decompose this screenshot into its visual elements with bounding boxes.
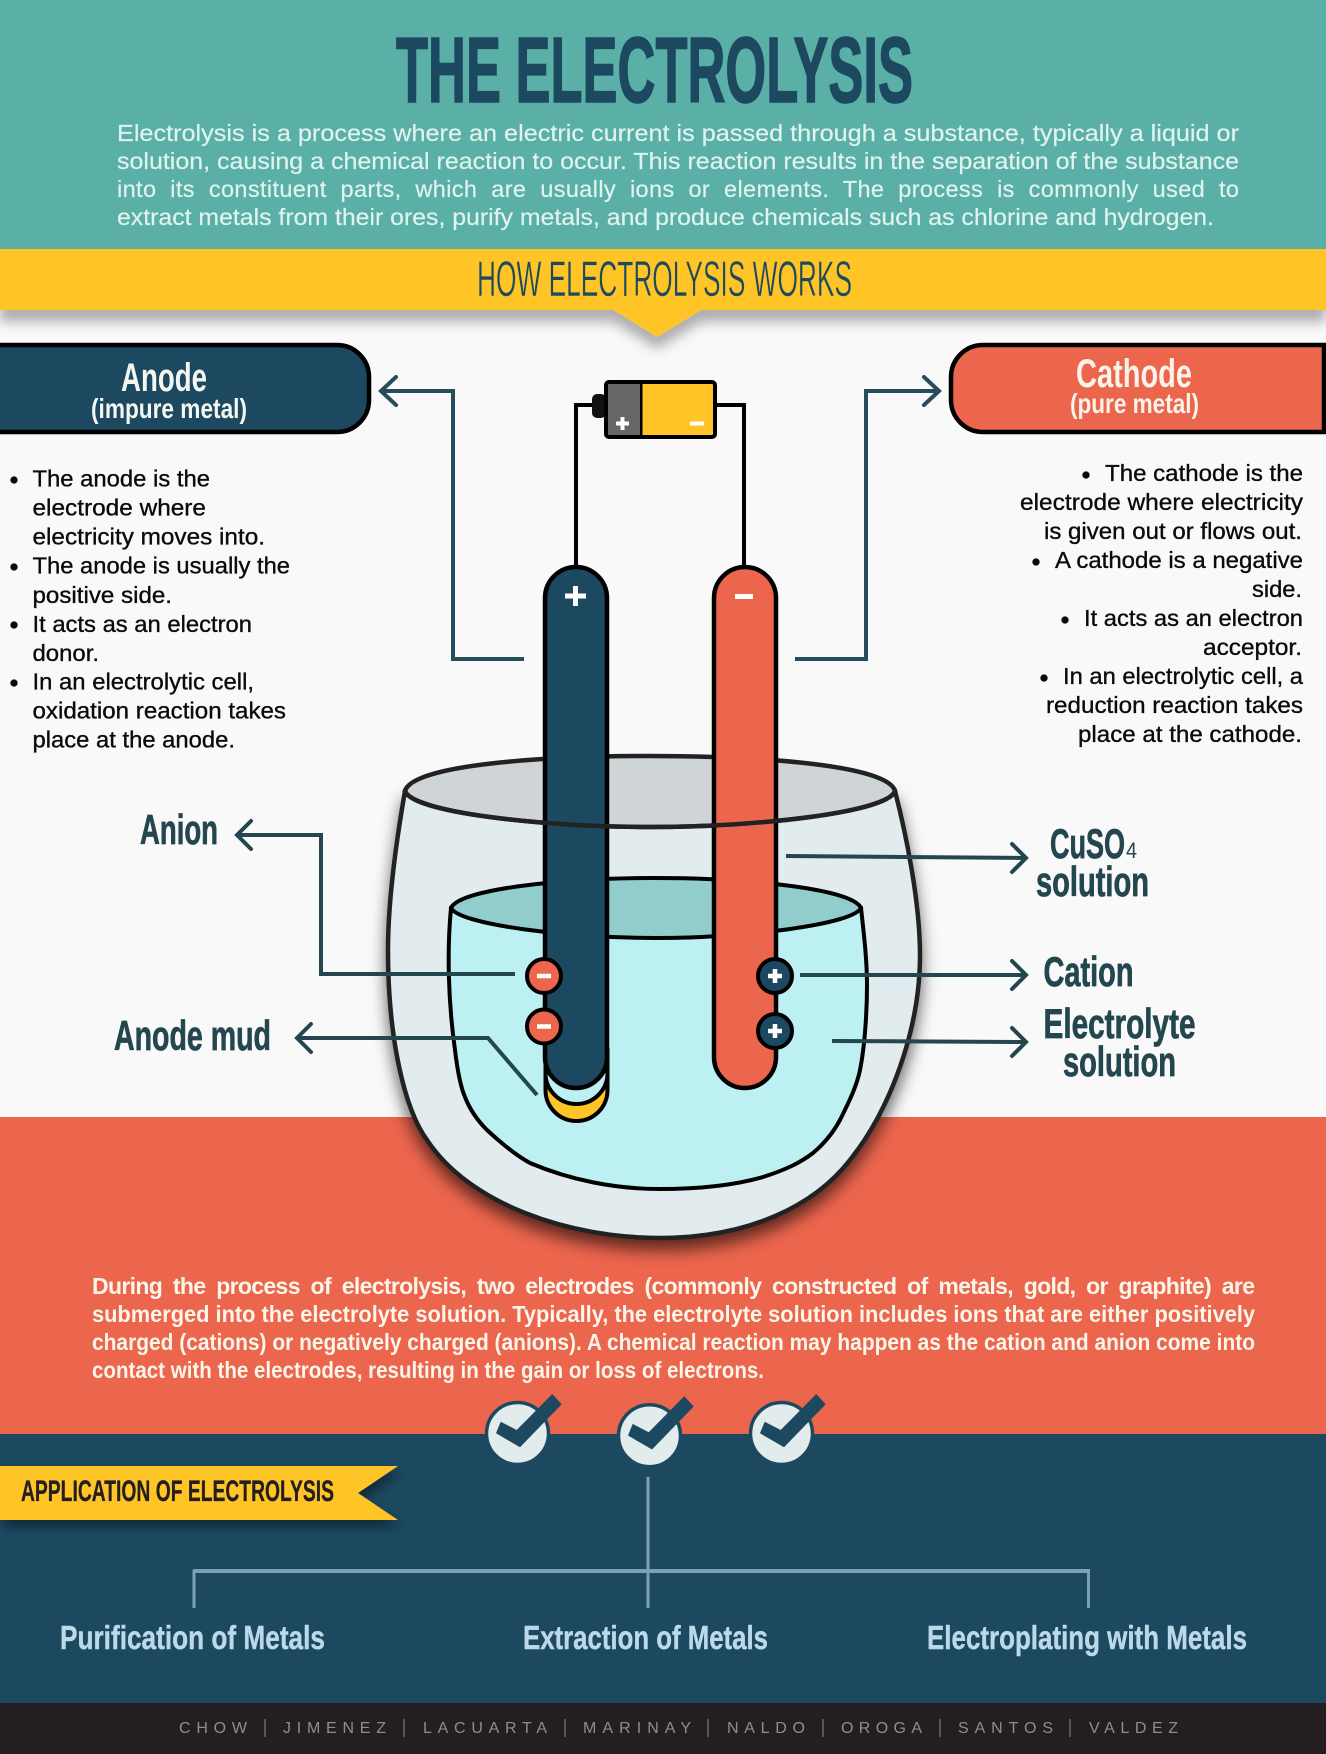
label: CuSO4 solution: 4	[1126, 838, 1137, 863]
label: CuSO4 solution	[1036, 820, 1149, 905]
panel: coral process section	[0, 1117, 1326, 1434]
panel: footer: LACUARTA	[423, 1720, 547, 1737]
panel: anode bullet list: positive side.	[32, 582, 172, 608]
section heading: HOW ELECTROLYSIS WORKS	[477, 251, 852, 307]
arrow: anion	[237, 821, 515, 974]
intro paragraph: solution, causing a chemical reaction to occur. This reaction results in the separation of the substance	[117, 148, 1239, 174]
panel: footer: NALDO	[727, 1720, 805, 1737]
process paragraph: submerged into the electrolyte solution. Typically, the electrolyte solution includes ions that are either positively	[92, 1301, 1255, 1327]
arrow: anode	[381, 377, 524, 659]
panel: cathode label	[951, 345, 1324, 432]
title: THE ELECTROLYSIS	[396, 18, 913, 122]
label: electroplating with metals: Electroplating with Metals	[927, 1619, 1247, 1656]
panel: cathode label: Cathode	[1076, 352, 1192, 396]
wires	[576, 405, 744, 567]
panel: footer	[0, 1703, 1326, 1754]
panel: footer: JIMENEZ	[283, 1720, 386, 1737]
cation ions	[758, 959, 792, 1048]
panel: anode bullet list: In an electrolytic cell,	[32, 668, 254, 694]
panel: cathode bullet list: It acts as an electron	[1084, 605, 1303, 631]
application banner: APPLICATION OF ELECTROLYSIS	[21, 1475, 334, 1508]
label: CuSO4 solution: CuSO	[1050, 820, 1125, 867]
panel: cathode bullet list: reduction reaction takes	[1046, 692, 1303, 718]
panel: anode bullet list: donor.	[32, 640, 99, 666]
panel: applications section	[0, 1434, 1326, 1703]
panel: cathode bullet list: is given out or flows out.	[1044, 518, 1302, 544]
panel: header	[0, 0, 1326, 249]
arrow: anode mud	[297, 1024, 537, 1095]
cathode electrode	[714, 567, 776, 1088]
electrolyte liquid	[449, 878, 867, 1189]
anion ions	[527, 959, 561, 1044]
panel: cathode bullet list: acceptor.	[1203, 634, 1302, 660]
icon: checkmark 2	[618, 1396, 694, 1467]
panel: anode bullet list: oxidation reaction takes	[32, 698, 286, 724]
label: extraction of metals: Extraction of Metals	[523, 1619, 768, 1656]
panel: cathode bullet list: The cathode is the	[1105, 460, 1303, 486]
anode mud deposit	[546, 1050, 608, 1121]
label: anode mud: Anode mud	[114, 1012, 271, 1059]
panel: cathode label: (pure metal)	[1070, 388, 1199, 419]
application banner	[0, 1466, 398, 1520]
intro paragraph	[117, 120, 1239, 230]
panel: anode bullet list: electrode where	[32, 494, 206, 520]
intro paragraph: into its constituent parts, which are usually ions or elements. The process is commonly used to	[117, 176, 1239, 202]
label: purification of metals: Purification of Metals	[60, 1619, 325, 1656]
label: electrolyte solution: Electrolyte	[1044, 1000, 1196, 1047]
panel: cathode bullet list: In an electrolytic cell, a	[1063, 663, 1304, 689]
panel: anode label	[0, 345, 369, 432]
panel: cathode bullet list	[1020, 460, 1304, 747]
label: CuSO4 solution: solution	[1036, 858, 1149, 905]
label: electrolyte solution	[1044, 1000, 1196, 1085]
intro paragraph: Electrolysis is a process where an electric current is passed through a substance, typically a liquid or	[117, 120, 1239, 146]
panel: cathode bullet list: place at the cathode.	[1078, 721, 1302, 747]
panel: footer: OROGA	[841, 1720, 922, 1737]
plus sign	[565, 586, 586, 606]
icon: checkmark 3	[750, 1394, 826, 1464]
label: cation: Cation	[1044, 948, 1134, 995]
intro paragraph: extract metals from their ores, purify metals, and produce chemicals such as chlorine and hydrogen.	[117, 204, 1214, 230]
arrow: cathode	[795, 377, 939, 659]
minus sign	[735, 594, 753, 599]
anode electrode	[545, 567, 607, 1088]
panel: anode bullet list: place at the anode.	[32, 726, 235, 752]
panel: anode label: (impure metal)	[91, 393, 247, 424]
panel: anode bullet list: It acts as an electron	[32, 611, 252, 637]
panel: footer: SANTOS	[958, 1720, 1053, 1737]
arrow: CuSO4 solution	[786, 844, 1026, 872]
arrow: cation	[800, 961, 1026, 989]
panel: anode bullet list: electricity moves into.	[32, 524, 265, 550]
label: electrolyte solution: solution	[1063, 1038, 1176, 1085]
process paragraph: contact with the electrodes, resulting in the gain or loss of electrons.	[92, 1357, 764, 1383]
panel: cathode bullet list: side.	[1252, 576, 1302, 602]
panel: anode bullet list	[10, 466, 290, 752]
panel: section banner	[0, 249, 1326, 337]
panel: footer: VALDEZ	[1089, 1720, 1178, 1737]
beaker body	[388, 791, 920, 1238]
panel: footer: CHOW	[179, 1720, 248, 1737]
beaker rim front edge	[405, 791, 895, 827]
panel: anode label: Anode	[121, 356, 207, 400]
process paragraph	[92, 1273, 1255, 1383]
tree connector	[193, 1477, 1090, 1608]
icon: checkmark 1	[486, 1394, 562, 1464]
beaker rim	[405, 756, 895, 827]
arrow: electrolyte solution	[832, 1028, 1026, 1056]
label: anion: Anion	[140, 806, 218, 853]
panel: footer: MARINAY	[583, 1720, 691, 1737]
panel: anode bullet list: The anode is the	[32, 466, 210, 492]
icon: battery	[592, 382, 715, 437]
process paragraph: During the process of electrolysis, two electrodes (commonly constructed of metals, gold, or graphite) are	[92, 1273, 1255, 1299]
panel: cathode bullet list: electrode where electricity	[1020, 489, 1303, 515]
panel: anode bullet list: The anode is usually the	[32, 552, 290, 578]
panel: cathode bullet list: A cathode is a negative	[1055, 547, 1303, 573]
